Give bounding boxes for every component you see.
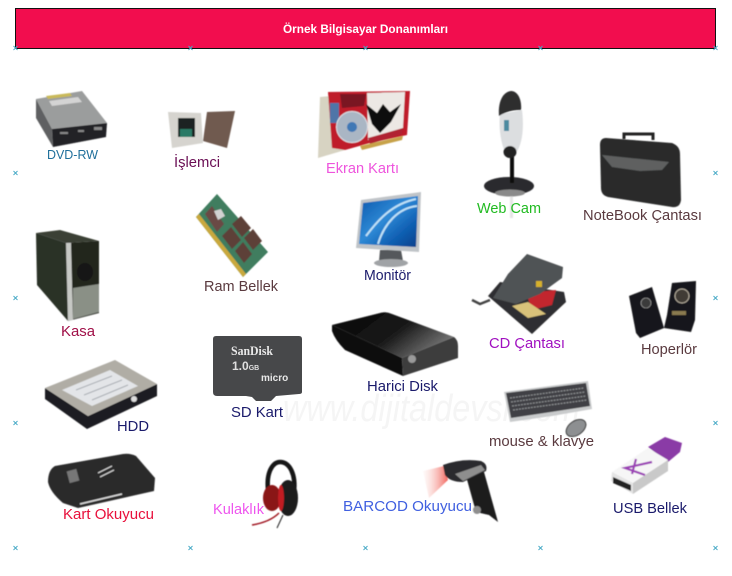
- item: Kasa: [36, 230, 99, 340]
- item: CD Çantası: [472, 254, 566, 352]
- label: Ekran Kartı: Ekran Kartı: [326, 161, 399, 177]
- icon: DVD drive: [36, 91, 107, 147]
- label: Web Cam: Web Cam: [477, 201, 541, 217]
- item: USB Bellek: [611, 437, 688, 517]
- item: Hoperlör: [629, 281, 697, 358]
- icon: memory card: 1.0GB: [232, 359, 259, 373]
- title banner: [16, 8, 716, 48]
- icon: USB stick: [611, 437, 682, 494]
- icon: notebook bag: [600, 134, 681, 207]
- label: NoteBook Çantası: NoteBook Çantası: [583, 208, 702, 224]
- item: Ram Bellek: [196, 194, 279, 295]
- label: Harici Disk: Harici Disk: [367, 379, 439, 395]
- icon: monitor: [356, 192, 421, 267]
- icon: memory card: SanDisk: [231, 344, 273, 358]
- label: HDD: HDD: [117, 419, 149, 435]
- icon: external disk: [332, 312, 458, 376]
- watermark: www.dijitaldevsi.com: [283, 388, 580, 430]
- item: HDD: [45, 360, 157, 435]
- icon: graphics card: [318, 91, 410, 158]
- icon: web camera: [484, 91, 534, 218]
- icon: CD bag: [472, 254, 566, 334]
- item: mouse & klavye: [489, 381, 594, 450]
- title banner: Örnek Bilgisayar Donanımları: [283, 21, 448, 36]
- icon: keyboard and mouse: [504, 381, 592, 440]
- icon: card reader: [48, 454, 155, 508]
- item: DVD-RW: [36, 91, 107, 162]
- item: Monitör: [356, 192, 421, 284]
- icon: barcode scanner: [423, 460, 498, 522]
- label: Kasa: Kasa: [61, 324, 96, 340]
- label: Kulaklık: Kulaklık: [213, 502, 265, 518]
- item: Kulaklık: [213, 462, 298, 528]
- label: BARCOD Okuyucu: BARCOD Okuyucu: [343, 499, 472, 515]
- label: CD Çantası: CD Çantası: [489, 336, 565, 352]
- label: Kart Okuyucu: Kart Okuyucu: [63, 507, 154, 523]
- item: NoteBook Çantası: [583, 134, 702, 224]
- icon: computer case: [36, 230, 99, 321]
- icon: memory card: micro: [261, 373, 288, 384]
- icon: hard disk: [45, 360, 157, 429]
- item: Web Cam: [477, 91, 541, 218]
- item: Harici Disk: [332, 312, 458, 395]
- item: Kart Okuyucu: [48, 454, 155, 523]
- icon: memory card: [213, 336, 302, 401]
- label: Ram Bellek: Ram Bellek: [204, 279, 279, 295]
- label: SD Kart: SD Kart: [231, 405, 283, 421]
- label: Monitör: Monitör: [364, 268, 411, 284]
- icon: processor: [168, 111, 235, 148]
- label: DVD-RW: DVD-RW: [47, 148, 98, 162]
- item: İşlemci: [168, 111, 235, 171]
- icon: headset: [252, 462, 298, 528]
- label: İşlemci: İşlemci: [174, 153, 220, 171]
- item: SD Kart: [213, 336, 302, 421]
- icon: RAM module: [196, 194, 268, 277]
- item: Ekran Kartı: [318, 91, 410, 177]
- icon: speakers: [629, 281, 696, 338]
- label: USB Bellek: USB Bellek: [613, 501, 688, 517]
- item: BARCOD Okuyucu: [343, 460, 498, 522]
- label: mouse & klavye: mouse & klavye: [489, 434, 594, 450]
- label: Hoperlör: Hoperlör: [641, 342, 697, 358]
